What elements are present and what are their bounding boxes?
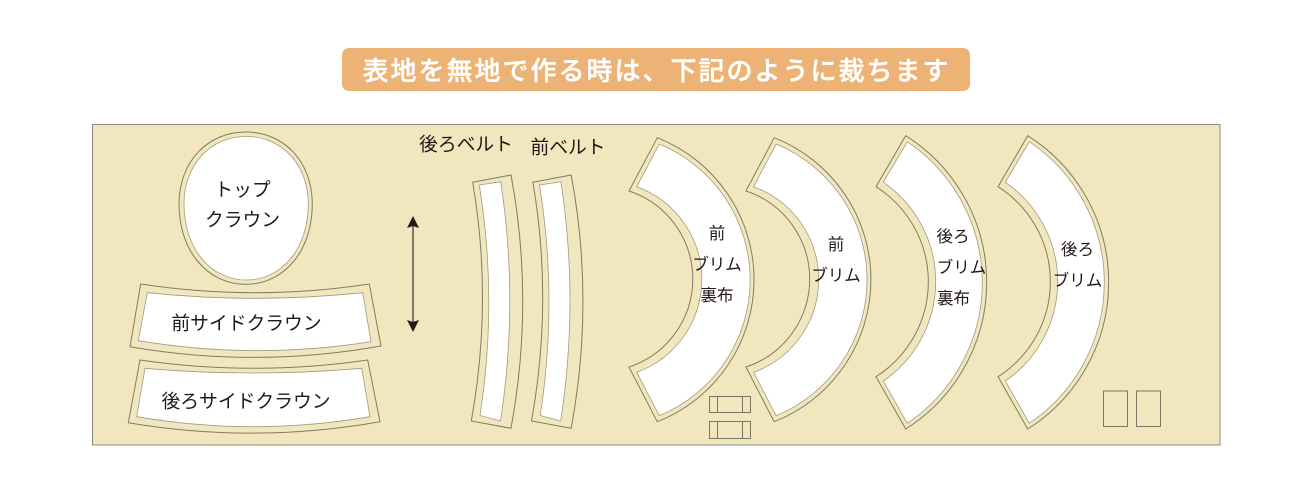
pattern piece: back side crown (128, 360, 380, 433)
pattern piece: top crown: クラウン (205, 209, 280, 230)
pattern piece: front belt (532, 175, 583, 428)
pattern piece: back brim lining: 後ろ (936, 227, 970, 246)
pattern piece: back brim (998, 136, 1109, 429)
pattern piece: front brim lining: ブリム (692, 254, 742, 274)
pattern piece: back brim: 後ろ (1061, 240, 1094, 259)
label: front belt: 前ベルト (530, 136, 606, 158)
pattern piece: front brim (746, 138, 871, 422)
small pieces: belt loops (710, 396, 750, 438)
pattern piece: back brim lining (876, 136, 987, 429)
pattern piece: back brim lining: 裏布 (937, 289, 970, 308)
title banner (342, 48, 970, 91)
pattern piece: back belt (471, 175, 523, 428)
label: back belt: 後ろベルト (419, 134, 513, 154)
pattern piece: top crown (179, 132, 312, 284)
pattern piece: back side crown: 後ろサイドクラウン (161, 390, 331, 412)
pattern piece: back brim: ブリム (1053, 270, 1102, 290)
pattern piece: back brim lining: ブリム (937, 257, 986, 277)
pattern piece: front brim lining: 裏布 (700, 286, 734, 305)
pattern piece: front brim lining (629, 138, 754, 422)
small pieces: rectangular tabs (1104, 391, 1160, 426)
pattern piece: front side crown: 前サイドクラウン (171, 312, 322, 334)
panel: fabric layout (92, 124, 1220, 445)
pattern piece: front brim: ブリム (811, 265, 861, 285)
pattern piece: front brim: 前 (828, 235, 844, 254)
arrow: grain direction (407, 216, 419, 332)
pattern piece: front brim lining: 前 (709, 224, 725, 243)
title banner: 表地を無地で作る時は、下記のように裁ちます (362, 56, 951, 86)
pattern piece: front side crown (130, 284, 381, 357)
pattern piece: top crown: トップ (214, 179, 271, 200)
